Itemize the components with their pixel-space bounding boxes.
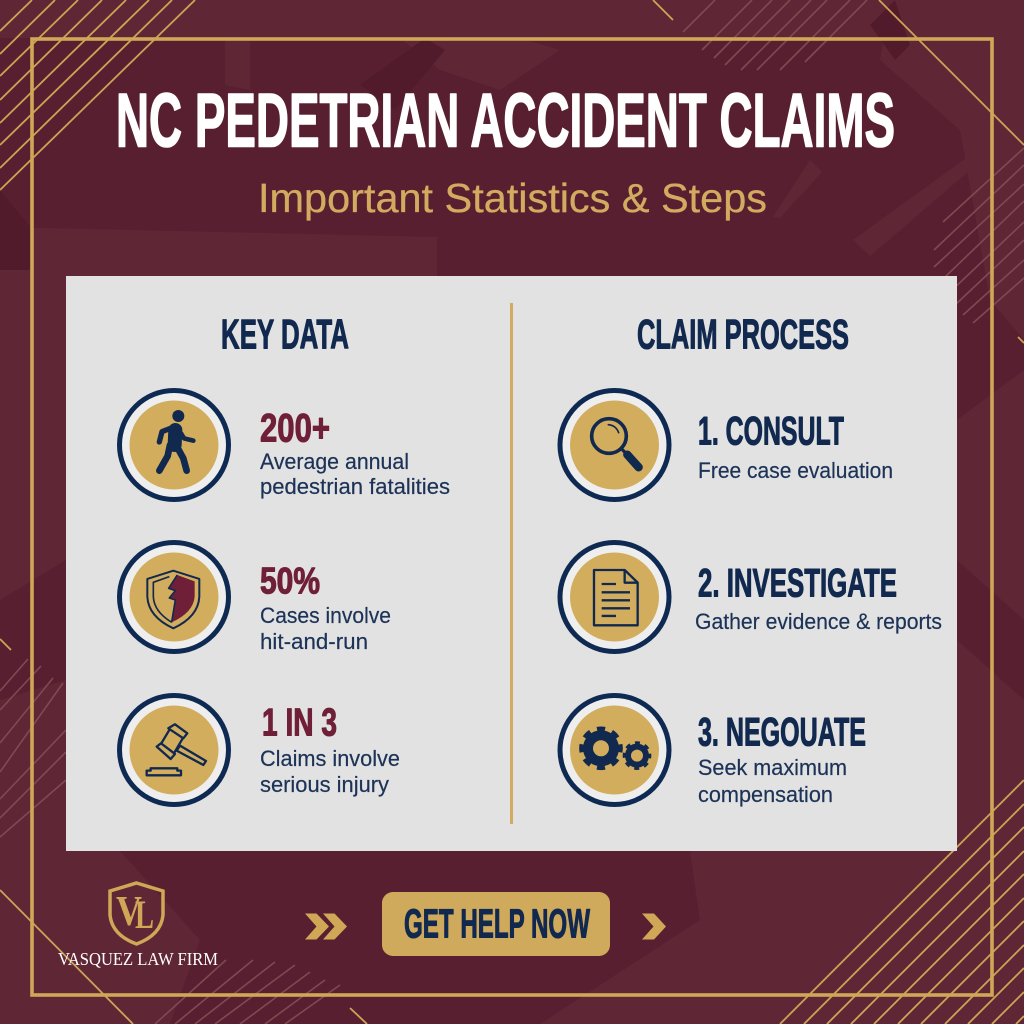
icon: magnifying glass	[560, 390, 669, 500]
stat: 50% hit-and-run	[120, 542, 391, 654]
stat description: Average annual	[260, 449, 409, 474]
stat description: pedestrian fatalities	[260, 474, 450, 499]
heading: claim process: CLAIM PROCESS	[637, 310, 849, 358]
step 3: negotiate	[560, 696, 866, 807]
stat description: Claims involve	[260, 746, 400, 771]
stat description: Cases involve	[260, 603, 391, 628]
panel: key data	[120, 310, 450, 804]
icon: single chevron arrow	[642, 914, 666, 940]
icon: logo shield: V	[116, 889, 142, 935]
button: get help now	[382, 892, 610, 956]
stat: 1 in 3 serious injury	[120, 696, 400, 804]
icon: gavel	[120, 696, 228, 804]
subtitle: Important Statistics & Steps	[258, 175, 767, 221]
stat value: 200+	[260, 406, 330, 450]
heading: key data: KEY DATA	[221, 310, 349, 358]
step description: compensation	[698, 782, 833, 807]
step title: 1. CONSULT	[698, 410, 844, 454]
icon: cracked shield	[120, 542, 228, 652]
stat description: hit-and-run	[260, 629, 368, 654]
stat description	[260, 449, 450, 499]
stat description	[260, 603, 391, 654]
button: get help now: GET HELP NOW	[404, 900, 590, 946]
icon: pedestrian	[120, 390, 228, 500]
stat value: 1 IN 3	[262, 702, 337, 744]
step title: 3. NEGOUATE	[698, 710, 866, 754]
step description: Seek maximum	[698, 755, 847, 780]
step title: 2. INVESTIGATE	[698, 562, 897, 606]
icon: logo shield: L	[135, 892, 154, 937]
icon: document	[560, 542, 669, 652]
step description: Free case evaluation	[698, 458, 893, 483]
firm name: VASQUEZ LAW FIRM	[58, 949, 218, 969]
step 2: investigate	[560, 542, 942, 652]
icon: gears	[560, 696, 669, 804]
icon: logo shield	[110, 883, 163, 944]
stat description	[260, 746, 400, 797]
icon: double chevron arrow	[305, 914, 347, 940]
step 1: consult	[560, 390, 893, 500]
stat: 200+ fatalities	[120, 390, 450, 500]
stat value: 50%	[260, 560, 320, 602]
panel: claim process	[560, 310, 942, 807]
step description	[698, 755, 847, 807]
stat description: serious injury	[260, 772, 389, 797]
logo: Vasquez Law Firm	[58, 883, 218, 969]
panel: content card	[66, 276, 957, 851]
step description: Gather evidence & reports	[695, 609, 942, 634]
